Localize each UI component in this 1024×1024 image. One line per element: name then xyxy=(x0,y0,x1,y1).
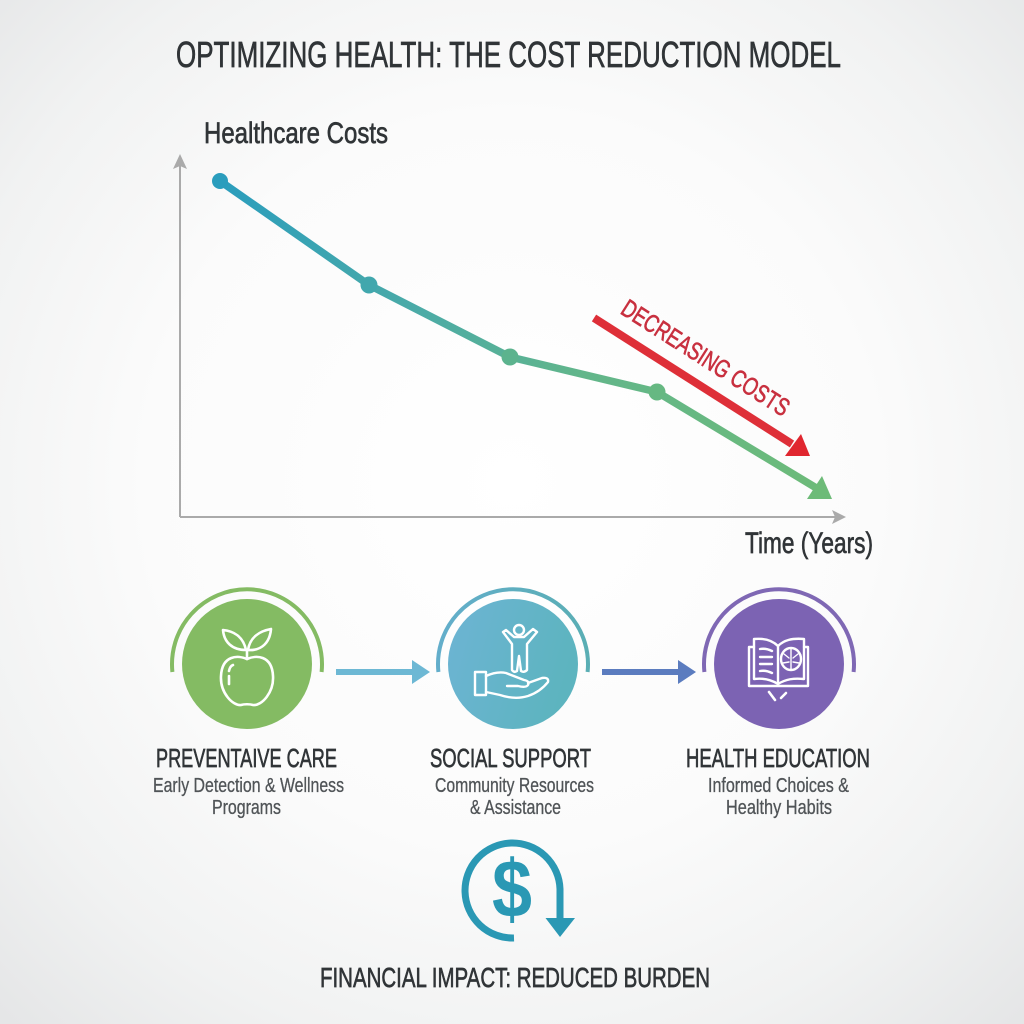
description xyxy=(435,775,594,819)
heading: HEALTH EDUCATION xyxy=(686,743,870,773)
description xyxy=(153,775,344,819)
decreasing costs label: DECREASING COSTS xyxy=(616,294,795,422)
icon: dollar with down arrow xyxy=(465,843,575,938)
description: Programs xyxy=(212,797,281,819)
panel: health education xyxy=(686,589,870,819)
cost trend line xyxy=(212,173,832,499)
description xyxy=(708,775,850,819)
financial impact caption: FINANCIAL IMPACT: REDUCED BURDEN xyxy=(320,962,710,993)
icon: book with brain xyxy=(749,639,808,700)
blue circle xyxy=(448,599,578,729)
axes xyxy=(173,154,846,524)
red decreasing arrow xyxy=(594,318,810,456)
arrow: support to education xyxy=(602,660,696,684)
heading: PREVENTAIVE CARE xyxy=(156,743,337,773)
description: Community Resources xyxy=(435,775,594,797)
icon: dollar with down arrow: $ xyxy=(492,844,532,935)
green circle xyxy=(182,599,312,729)
heading: SOCIAL SUPPORT xyxy=(430,743,591,773)
icon: person over hand xyxy=(475,625,548,698)
y axis label: Healthcare Costs xyxy=(204,117,388,150)
description: & Assistance xyxy=(470,797,561,819)
purple circle xyxy=(714,599,844,729)
description: Early Detection & Wellness xyxy=(153,775,344,797)
arrow: care to support xyxy=(336,660,430,684)
panel: preventative care xyxy=(153,589,344,819)
purple arc xyxy=(704,589,854,672)
description: Informed Choices & xyxy=(708,775,850,797)
x axis label: Time (Years) xyxy=(745,527,873,560)
green arc xyxy=(172,589,322,672)
icon: apple xyxy=(221,629,273,705)
panel: social support xyxy=(430,589,594,819)
blue arc xyxy=(438,589,588,672)
description: Healthy Habits xyxy=(726,797,832,819)
line chart: healthcare costs over time xyxy=(173,117,873,560)
